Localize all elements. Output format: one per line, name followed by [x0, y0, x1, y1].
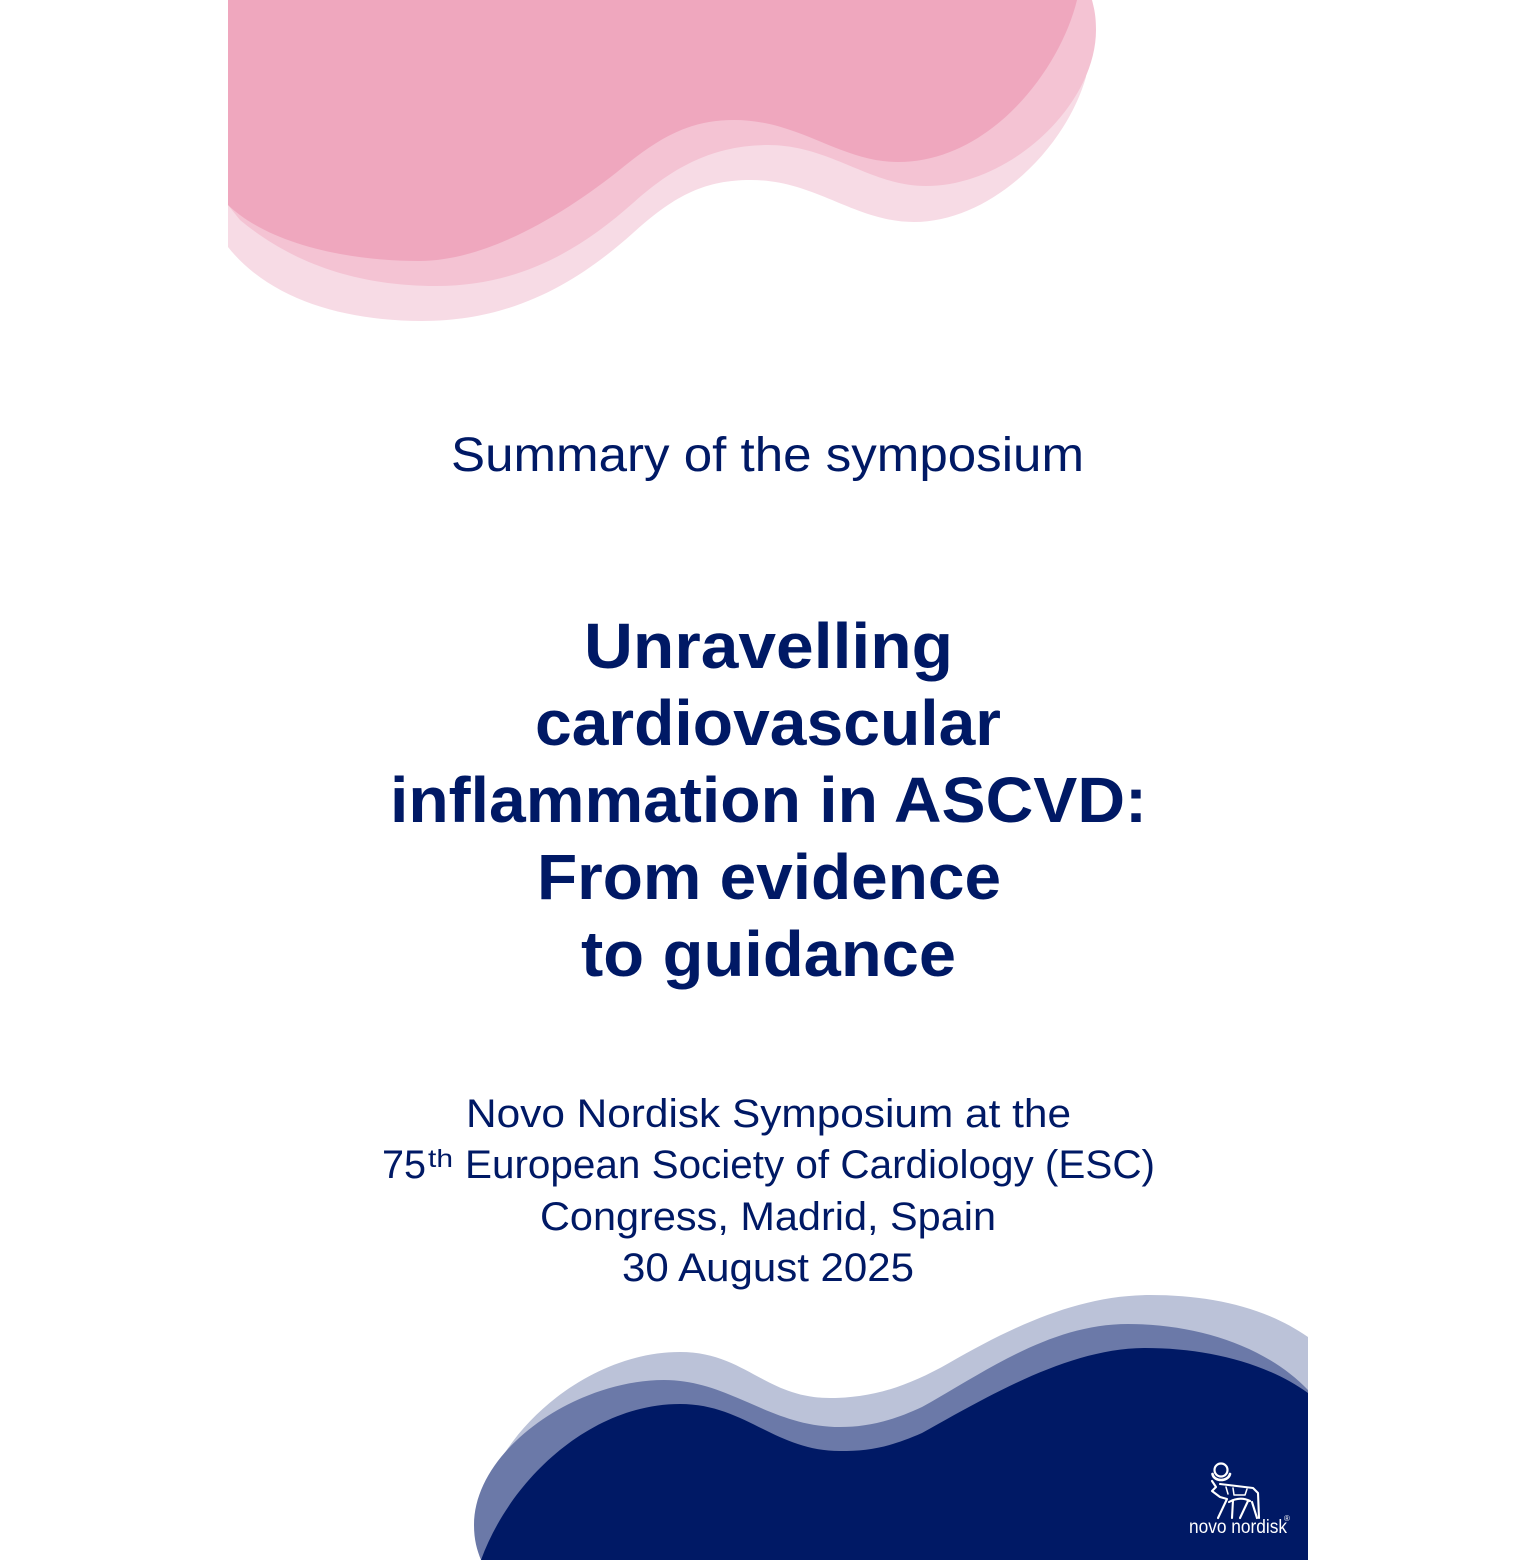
title: cardiovascular	[535, 687, 1001, 759]
icon: Apis bull with sun disc	[1212, 1464, 1259, 1518]
event details	[382, 1092, 1155, 1290]
title	[390, 610, 1147, 990]
navy wave decoration	[474, 1295, 1308, 1560]
title: to guidance	[581, 918, 956, 990]
event details: European Society of Cardiology (ESC)	[465, 1143, 1155, 1187]
event details: 75	[382, 1143, 426, 1187]
event details: 30 August 2025	[622, 1246, 914, 1290]
event details: Congress, Madrid, Spain	[540, 1195, 996, 1239]
registered mark: ®	[1284, 1514, 1290, 1523]
title: inflammation in ASCVD:	[390, 764, 1147, 836]
event details: th	[428, 1145, 453, 1173]
logo: novo nordisk	[1189, 1464, 1290, 1538]
title: From evidence	[537, 841, 1001, 913]
event details: Novo Nordisk Symposium at the	[466, 1092, 1071, 1136]
pink wave decoration	[228, 0, 1096, 321]
subtitle: Summary of the symposium	[451, 429, 1084, 482]
title: Unravelling	[584, 610, 953, 682]
logo wordmark: novo nordisk	[1189, 1517, 1287, 1538]
